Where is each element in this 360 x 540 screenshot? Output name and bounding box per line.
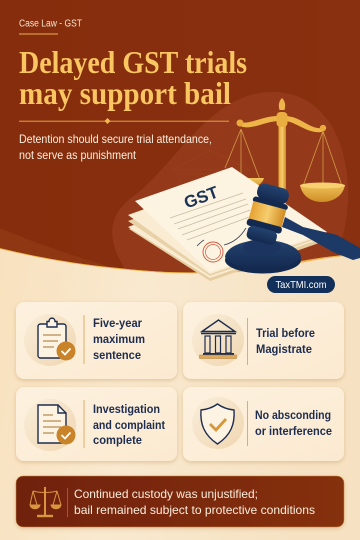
title: Delayed GST trials <box>19 44 247 80</box>
document lines <box>170 193 252 240</box>
card text: Trial before <box>256 328 315 340</box>
subtitle: not serve as punishment <box>19 148 137 162</box>
beam <box>240 116 278 127</box>
divider <box>84 315 85 364</box>
pole <box>278 124 286 218</box>
card text: Investigation <box>93 404 160 416</box>
card text: Magistrate <box>256 344 312 356</box>
eyebrow label: Case Law - GST <box>19 18 82 30</box>
banner text: Continued custody was unjustified; <box>74 487 258 501</box>
card text: maximum <box>93 334 145 346</box>
brand badge <box>267 276 335 293</box>
signature <box>197 228 246 246</box>
card text: or interference <box>255 426 332 438</box>
subtitle: Detention should secure trial attendance, <box>19 132 212 146</box>
base <box>262 211 312 232</box>
card text: Five-year <box>93 318 142 330</box>
illustration: GST document stack <box>128 167 327 281</box>
strings <box>225 129 342 186</box>
card: investigation and complaint complete <box>16 387 177 461</box>
divider <box>247 401 248 446</box>
card text <box>255 410 332 438</box>
left pan <box>222 178 264 188</box>
divider <box>247 318 248 365</box>
icon: shield with check <box>192 397 244 449</box>
title divider <box>19 118 229 124</box>
card text <box>93 318 145 362</box>
card text <box>256 328 315 356</box>
card: five-year maximum sentence <box>16 302 177 379</box>
halo behind scales <box>112 92 348 280</box>
lower left band <box>0 228 112 268</box>
card text: complete <box>93 435 142 447</box>
icon: clipboard with check <box>24 314 76 366</box>
header panel <box>0 0 360 280</box>
GST heading on document: GST <box>181 182 221 212</box>
finial <box>279 98 285 110</box>
icon: courthouse <box>192 314 244 366</box>
title <box>19 44 247 111</box>
card: no absconding or interference <box>183 387 344 461</box>
card text <box>93 404 165 447</box>
title: may support bail <box>19 75 231 111</box>
divider <box>84 400 85 448</box>
illustration: gavel <box>225 181 360 274</box>
card text: No absconding <box>255 410 331 422</box>
banner text: bail remained subject to protective conditions <box>74 503 315 517</box>
card: trial before magistrate <box>183 302 344 379</box>
eyebrow underline <box>19 34 58 35</box>
divider <box>66 488 69 517</box>
icon: document with check <box>24 399 76 451</box>
banner text <box>74 487 315 517</box>
handle <box>282 217 360 260</box>
seal stamp <box>203 242 223 262</box>
icon: balance scale <box>30 487 61 516</box>
subtitle <box>19 132 212 162</box>
faint courthouse <box>172 150 250 205</box>
gavel head <box>243 181 292 247</box>
right pan <box>300 183 345 202</box>
illustration: scales of justice <box>222 98 345 232</box>
brand badge: TaxTMI.com <box>276 279 327 291</box>
card text: and complaint <box>93 420 165 432</box>
sound block <box>225 246 301 274</box>
card text: sentence <box>93 350 141 362</box>
conclusion banner <box>16 476 344 527</box>
